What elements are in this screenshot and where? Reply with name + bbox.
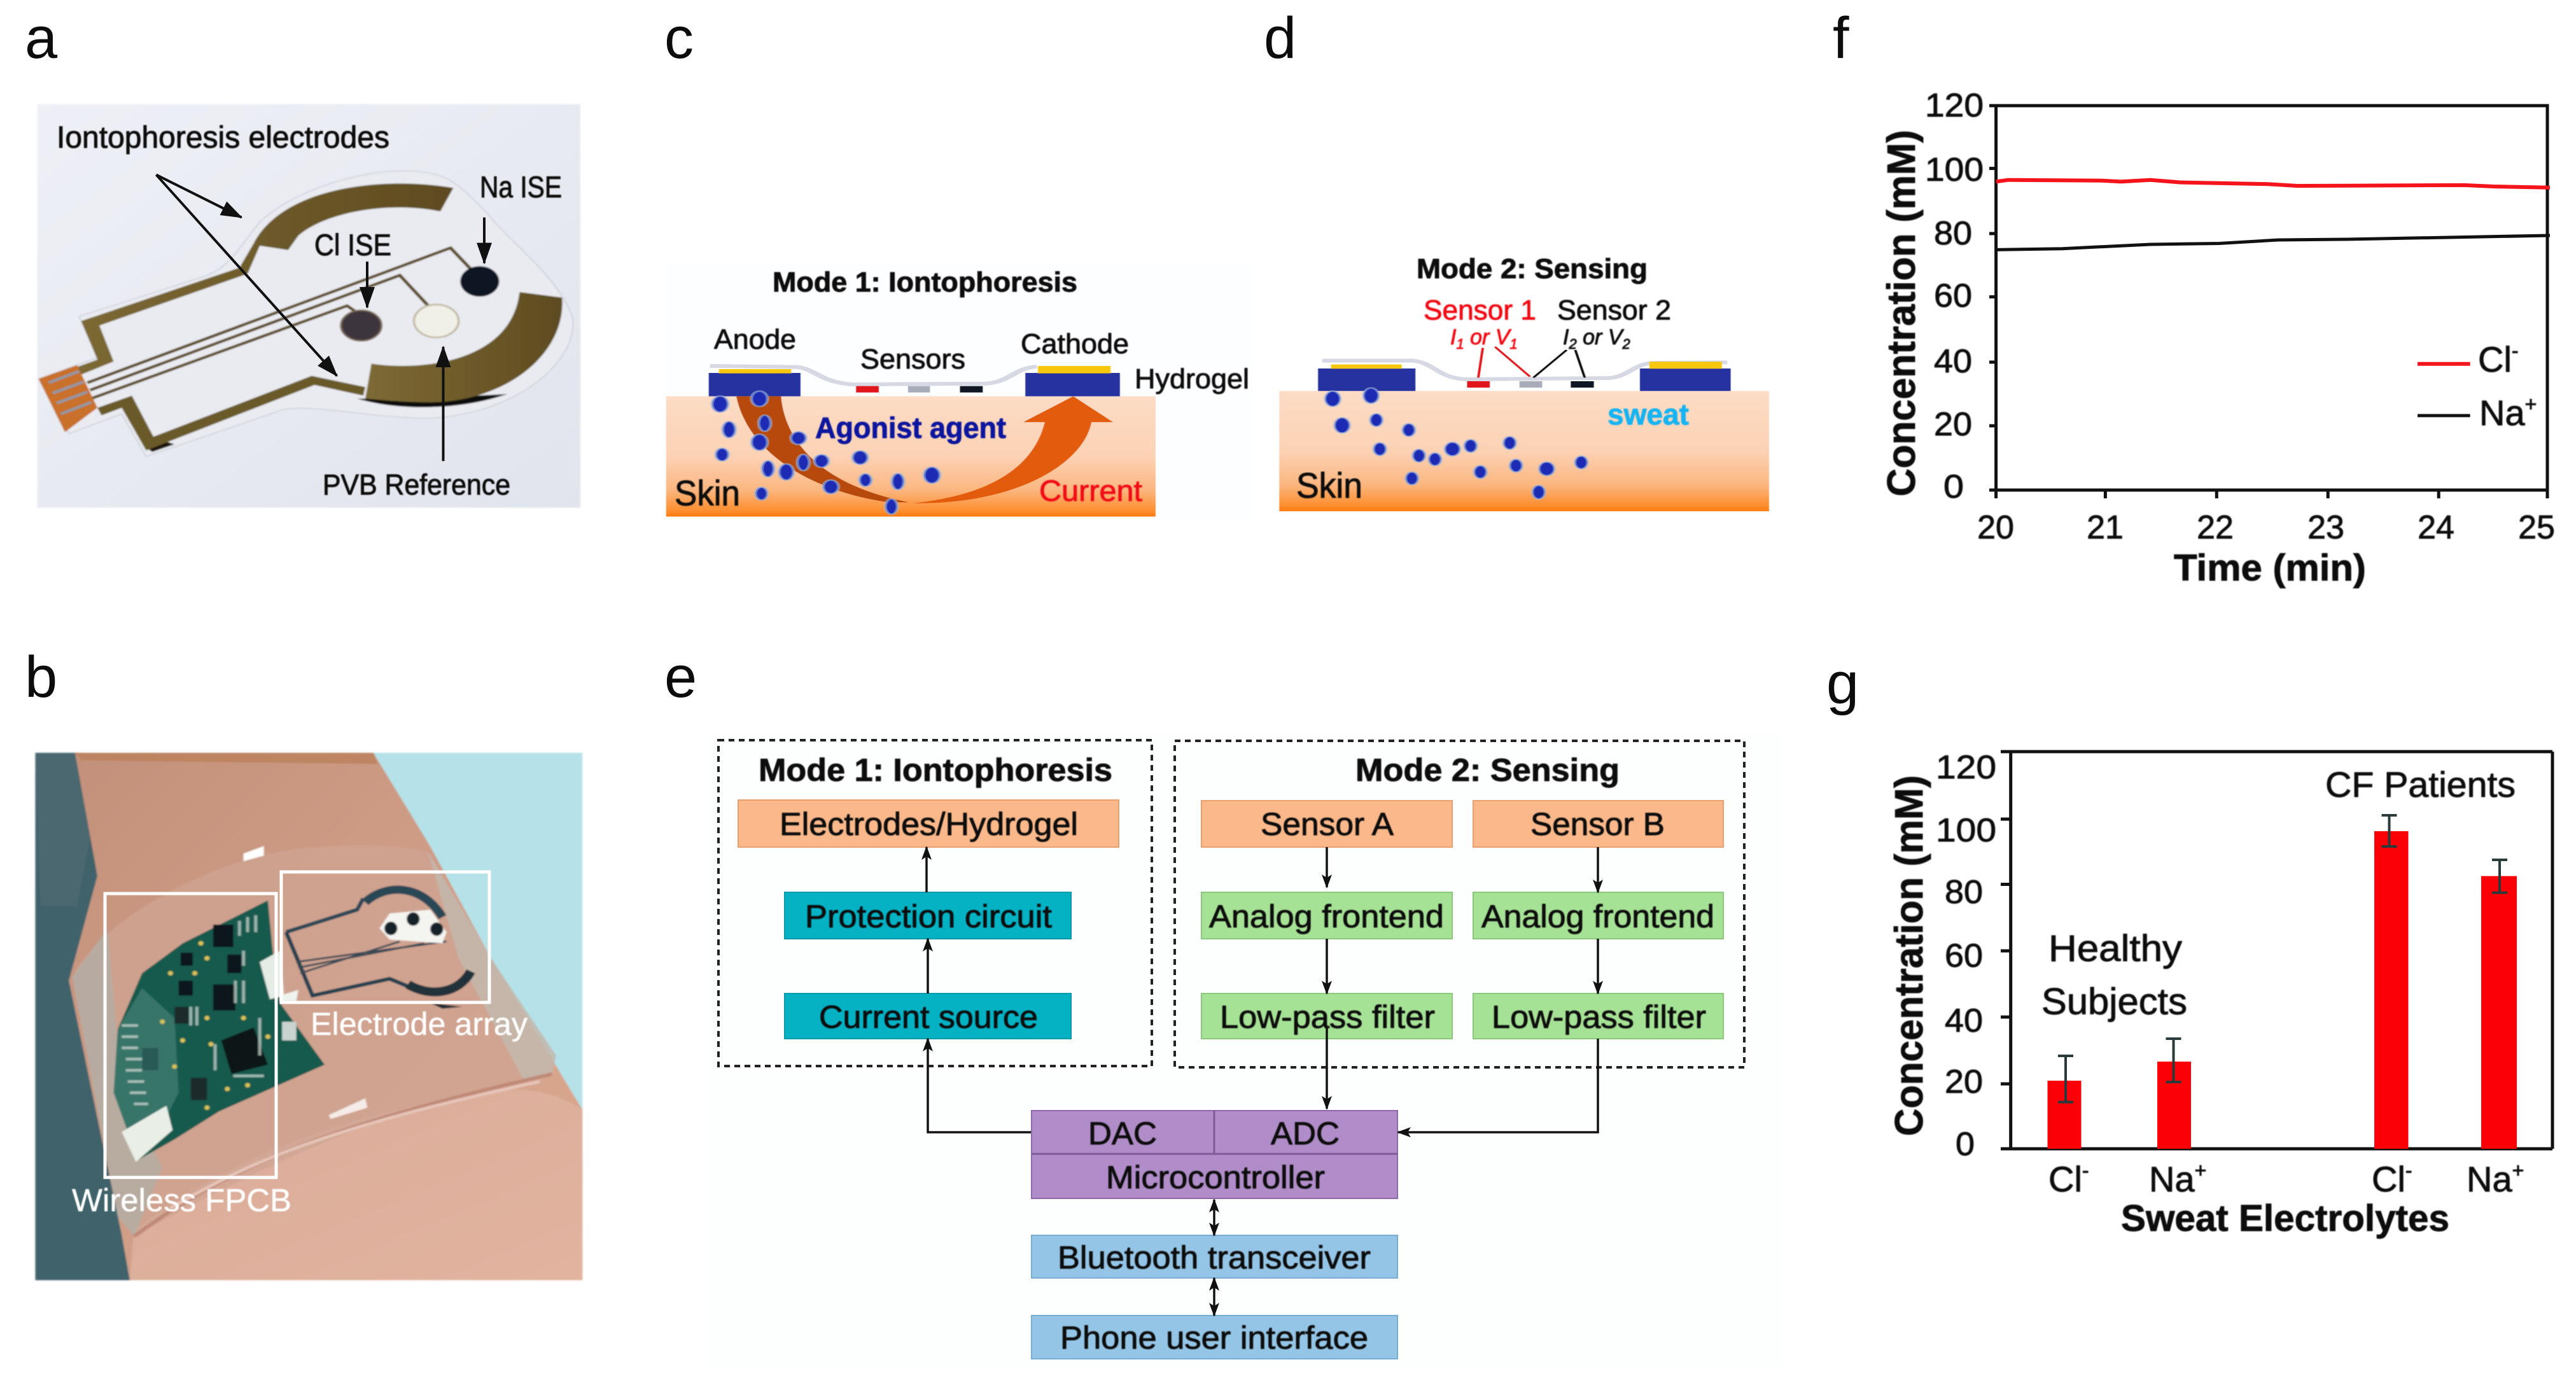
- group label: healthy subjects: Healthy: [2048, 928, 2182, 969]
- highlight box: electrode array: [281, 872, 489, 1002]
- sweat dots: [1325, 388, 1588, 499]
- x category labels: +: [2512, 1159, 2524, 1182]
- text: sensor B: Sensor B: [1530, 806, 1665, 842]
- arrows: [157, 175, 484, 461]
- label: skin: Skin: [675, 473, 740, 513]
- x category labels: Cl: [2372, 1159, 2405, 1199]
- title: mode 2: Mode 2: Sensing: [1417, 253, 1648, 284]
- mode 1 dashed group: [718, 740, 1152, 1066]
- y tick labels: [1936, 749, 1996, 1163]
- x category labels: +: [2195, 1159, 2206, 1182]
- x tick labels: 20: [1977, 509, 2014, 546]
- y tick labels: 80: [1934, 215, 1972, 252]
- text: bluetooth transceiver: Bluetooth transceiver: [1058, 1240, 1371, 1275]
- label: I2 or V2: 2: [1622, 336, 1630, 352]
- diagram background: [706, 732, 1782, 1368]
- y tick labels: 120: [1936, 749, 1996, 786]
- x tick labels: 21: [2087, 509, 2124, 546]
- highlight box: wireless FPCB: [105, 894, 276, 1177]
- y tick labels: 100: [1936, 812, 1996, 849]
- panel a: electrode array photo: [38, 104, 580, 508]
- x category labels: [2048, 1159, 2524, 1199]
- label: sweat: sweat: [1607, 398, 1689, 431]
- board components: [160, 941, 270, 1110]
- block: current source: [785, 993, 1071, 1039]
- block: electrodes/hydrogel: [738, 800, 1119, 847]
- label: agonist agent: Agonist agent: [815, 411, 1006, 444]
- label: I1 or V1: or V: [1464, 325, 1512, 349]
- label: I1 or V1: 1: [1510, 336, 1518, 352]
- label: sensor 1: Sensor 1: [1424, 295, 1536, 326]
- label: I2 or V2: 2: [1568, 336, 1577, 352]
- panel letter a: a: [25, 6, 58, 71]
- text: analog frontend B: Analog frontend: [1481, 899, 1714, 934]
- text: electrodes/hydrogel: Electrodes/Hydrogel: [780, 806, 1078, 842]
- text: low-pass filter B: Low-pass filter: [1492, 999, 1706, 1035]
- skin and electrodes: [666, 366, 1156, 517]
- label: electrode array: Electrode array: [311, 1006, 528, 1042]
- block: phone user interface: [1032, 1316, 1397, 1359]
- label: I1 or V1: I: [1450, 325, 1456, 349]
- x category labels: Cl: [2048, 1159, 2082, 1199]
- x category labels: -: [2082, 1159, 2089, 1182]
- label: Cl ISE: Cl ISE: [314, 228, 391, 262]
- x tick labels: 24: [2418, 509, 2454, 546]
- panel letter d: d: [1264, 6, 1296, 71]
- legend: +: [2525, 393, 2537, 416]
- label: wireless FPCB: Wireless FPCB: [72, 1183, 291, 1218]
- panel b: wrist device photo: [35, 753, 582, 1281]
- label: I2 or V2: or V: [1577, 325, 1625, 349]
- y tick labels: 20: [1934, 406, 1972, 443]
- panel letter b: b: [25, 645, 57, 710]
- block: analog frontend B: [1473, 892, 1723, 939]
- panel d: mode 2 sensing diagram: [1279, 253, 1769, 511]
- y tick labels: 40: [1934, 343, 1972, 380]
- y axis title: Concentration (mM): [1887, 775, 1931, 1136]
- skin and electrodes: [1279, 347, 1769, 511]
- label: I2 or V2: I: [1563, 325, 1569, 349]
- group label: CF patients: CF Patients: [2325, 764, 2516, 804]
- x category labels: Na: [2467, 1159, 2512, 1199]
- block: protection circuit: [785, 892, 1071, 939]
- text: ADC: ADC: [1271, 1116, 1340, 1151]
- label: cathode: Cathode: [1021, 328, 1129, 360]
- x axis title: Sweat Electrolytes: [2121, 1198, 2449, 1239]
- x tick labels: 22: [2197, 509, 2234, 546]
- panel letter g: g: [1826, 651, 1859, 716]
- x category labels: Na: [2149, 1159, 2195, 1199]
- y tick labels: 40: [1945, 1002, 1983, 1039]
- bars: [2048, 831, 2517, 1149]
- heading: mode 2: Mode 2: Sensing: [1355, 752, 1620, 788]
- label: iontophoresis electrodes: Iontophoresis electrodes: [57, 121, 389, 155]
- y tick labels: 120: [1925, 87, 1984, 124]
- label: sensors: Sensors: [860, 344, 965, 375]
- group label: healthy subjects: Subjects: [2041, 981, 2187, 1022]
- x tick labels: 25: [2518, 509, 2555, 546]
- label: PVB reference: PVB Reference: [323, 468, 510, 501]
- y tick labels: 0: [1943, 468, 1964, 505]
- label: hydrogel: Hydrogel: [1135, 363, 1249, 395]
- y tick labels: 0: [1956, 1126, 1975, 1163]
- panel f: concentration over time line chart: [1880, 87, 2555, 589]
- legend: -: [2512, 339, 2519, 362]
- y tick labels: 60: [1934, 277, 1972, 314]
- label: sensor 2: Sensor 2: [1557, 295, 1671, 326]
- block: low-pass filter B: [1473, 993, 1723, 1039]
- y tick labels: [1925, 87, 1984, 505]
- block: sensor A: [1201, 801, 1452, 847]
- block: analog frontend A: [1201, 892, 1452, 939]
- text: microcontroller: Microcontroller: [1106, 1160, 1325, 1195]
- mode 2 dashed group: [1175, 741, 1744, 1067]
- panel c: mode 1 iontophoresis diagram: [666, 263, 1254, 522]
- y tick labels: 60: [1945, 937, 1983, 974]
- x tick labels: 23: [2307, 509, 2344, 546]
- text: protection circuit: Protection circuit: [805, 899, 1052, 934]
- y tick labels: 80: [1945, 874, 1983, 911]
- flow arrows: [927, 847, 1598, 1316]
- diagram background: [666, 263, 1254, 522]
- panel letter c: c: [664, 6, 694, 71]
- legend: Na: [2479, 393, 2525, 433]
- Cl- line: [1996, 180, 2550, 188]
- legend: [2418, 339, 2537, 433]
- text: sensor A: Sensor A: [1261, 806, 1394, 842]
- label: I1 or V1: 1: [1456, 336, 1464, 352]
- panel e: system block diagram: [706, 732, 1782, 1368]
- text: analog frontend A: Analog frontend: [1209, 899, 1444, 934]
- label: Na ISE: Na ISE: [480, 170, 562, 204]
- error bars: [2058, 815, 2507, 1102]
- agonist agent dots: [712, 391, 940, 514]
- device photo: [38, 104, 580, 508]
- legend: Cl: [2478, 339, 2512, 379]
- axes and ticks: [2001, 752, 2552, 1149]
- label: anode: Anode: [714, 324, 796, 355]
- panel letter e: e: [664, 645, 697, 710]
- text: low-pass filter A: Low-pass filter: [1220, 999, 1435, 1035]
- group label: healthy subjects: [2041, 928, 2187, 1022]
- heading: mode 1: Mode 1: Iontophoresis: [759, 752, 1112, 788]
- block: microcontroller with DAC and ADC: [1032, 1111, 1397, 1198]
- text: current source: Current source: [819, 999, 1038, 1035]
- Na+ line: [1996, 235, 2550, 249]
- panel g: sweat electrolytes bar chart: [1887, 749, 2552, 1239]
- label: current: Current: [1039, 474, 1142, 507]
- y tick labels: 20: [1945, 1064, 1983, 1100]
- x category labels: -: [2405, 1159, 2412, 1182]
- block: low-pass filter A: [1201, 993, 1452, 1039]
- x tick labels: [1977, 509, 2555, 546]
- text: DAC: DAC: [1088, 1116, 1157, 1151]
- y axis title: Concentration (mM): [1880, 130, 1924, 496]
- arm photo: [35, 753, 582, 1281]
- x axis title: Time (min): [2174, 547, 2366, 589]
- label: skin: Skin: [1296, 465, 1362, 505]
- axes and ticks: [1989, 106, 2547, 498]
- panel letter f: f: [1833, 6, 1849, 71]
- text: phone user interface: Phone user interface: [1060, 1320, 1368, 1356]
- y tick labels: 100: [1925, 151, 1984, 188]
- title: mode 1: Mode 1: Iontophoresis: [773, 267, 1077, 298]
- block: sensor B: [1473, 801, 1723, 847]
- block: bluetooth transceiver: [1032, 1235, 1397, 1278]
- board pads: [122, 915, 264, 1104]
